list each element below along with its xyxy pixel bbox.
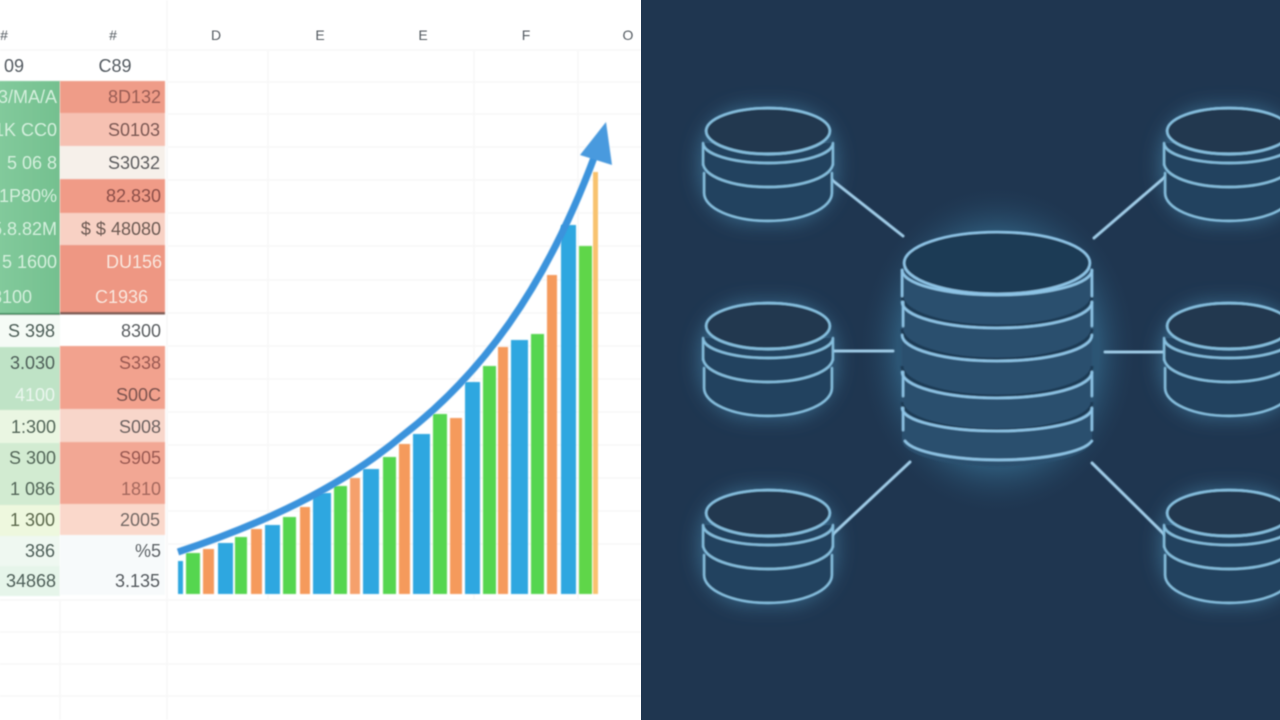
red column values: $ $ 48080 xyxy=(81,219,161,239)
green column values: 1:300 xyxy=(11,417,56,437)
red column values: S338 xyxy=(119,353,161,373)
panel: spreadsheet xyxy=(0,0,641,720)
red column values: 82.830 xyxy=(106,186,161,206)
bar chart xyxy=(178,172,598,594)
row of column titles: 09 xyxy=(4,56,24,76)
green column values: 34868 xyxy=(6,571,56,591)
red column values: S00C xyxy=(116,385,161,405)
panel: database network xyxy=(641,0,1280,720)
row of column titles xyxy=(4,56,132,76)
red column values: S3032 xyxy=(108,153,160,173)
column headers: D xyxy=(211,27,221,43)
arrow: growth trend xyxy=(178,122,612,552)
red column values: 3.135 xyxy=(115,571,160,591)
row of column titles: C89 xyxy=(98,56,132,76)
green column values: 3.030 xyxy=(10,353,55,373)
column headers: O xyxy=(623,27,634,43)
column headers: # xyxy=(0,27,8,43)
green column values: 4100 xyxy=(15,385,55,405)
red column values: 1810 xyxy=(121,479,161,499)
column headers: F xyxy=(522,27,530,43)
database: bottom right xyxy=(1164,490,1280,603)
green column values: 1 086 xyxy=(10,479,55,499)
green column values: 5 1600 xyxy=(2,252,57,272)
red column values: 8D132 xyxy=(108,87,161,107)
column headers: # xyxy=(109,27,117,43)
red column values: C1936 xyxy=(95,287,148,307)
column headers: E xyxy=(418,27,428,43)
connector lines xyxy=(832,177,1165,535)
red heatmap column xyxy=(60,81,165,595)
database: central stack xyxy=(902,232,1092,466)
column headers xyxy=(0,27,634,43)
red column values: 2005 xyxy=(120,510,160,530)
red column values: S0103 xyxy=(108,120,160,140)
glow layer behind icons xyxy=(700,108,1280,604)
red column values: DU156 xyxy=(106,252,162,272)
database: bottom left xyxy=(703,490,833,603)
green column values xyxy=(0,87,57,591)
red column values: S905 xyxy=(119,448,161,468)
database: middle right xyxy=(1164,303,1280,416)
green column values: S 398 xyxy=(8,321,55,341)
red column values: S008 xyxy=(119,417,161,437)
central glow xyxy=(858,185,1138,515)
red column values xyxy=(81,87,162,591)
green column values: 386 xyxy=(25,541,55,561)
green heatmap column xyxy=(0,81,60,596)
database: top right xyxy=(1164,108,1280,221)
red column values: %5 xyxy=(135,541,161,561)
green column values: 1 300 xyxy=(10,510,55,530)
green column values: 5 06 8 xyxy=(7,153,57,173)
red column values: 8300 xyxy=(121,321,161,341)
column headers: E xyxy=(315,27,325,43)
database: top left xyxy=(703,108,833,221)
green column values: S 300 xyxy=(9,448,56,468)
database: middle left xyxy=(703,303,833,416)
